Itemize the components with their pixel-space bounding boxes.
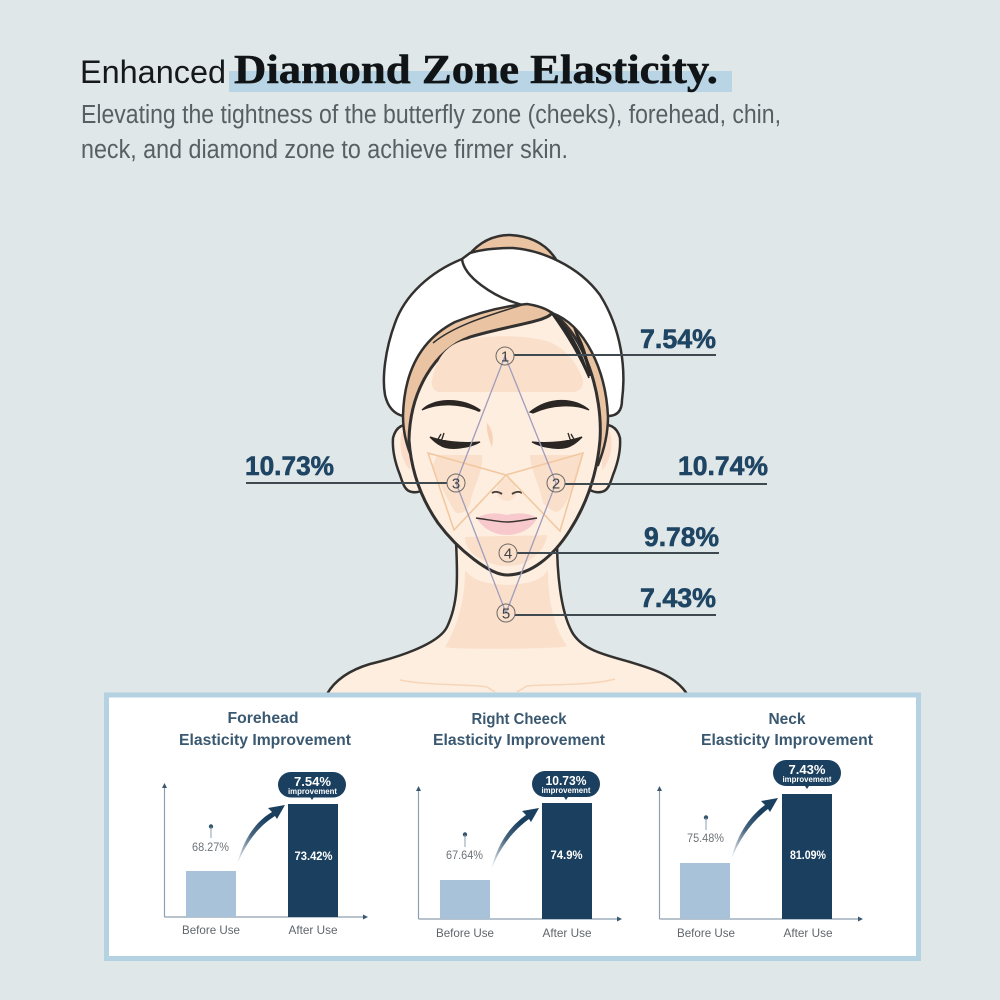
before value [192,824,229,854]
diamond zone lines [456,356,556,613]
title [80,46,732,92]
subtitle text [81,101,781,164]
marker 4 and value 9.78%: 9.78% [644,522,719,552]
improvement pill [532,771,600,800]
improvement pill [773,760,841,789]
before bar [186,871,236,917]
after bar [782,794,832,919]
marker 1 and value 7.54%: 7.54% [640,324,716,354]
cheek zones [433,455,582,513]
subtitle text: Elevating the tightness of the butterfly zone (cheeks), forehead, chin, [81,101,781,129]
face [409,313,600,575]
lips [477,513,537,535]
eyebrows [422,400,589,413]
heading [701,711,873,749]
growth arrow [491,808,539,870]
marker 1 and value 7.54%: 1 [501,348,509,366]
before value: 75.48% [687,833,724,845]
improvement pill: 7.43% [788,762,826,777]
closed eyes [430,433,582,448]
growth arrow [731,798,778,860]
after value: 81.09% [790,850,826,862]
marker 2 and value 10.74%: 10.74% [678,451,768,481]
marker 2 and value 10.74% [547,451,768,492]
collarbone lines [400,679,615,692]
axis labels [436,926,592,940]
hair strand [433,305,522,343]
after bar [542,803,592,919]
after value: 74.9% [550,850,582,862]
before value [446,832,483,862]
heading [179,710,351,749]
heading [433,711,605,749]
before bar [440,880,490,919]
axis labels: After Use [542,926,592,940]
improvement pill: 10.73% [546,773,587,788]
marker 3 and value 10.73% [245,451,465,492]
after bar [288,804,338,917]
marker 1 and value 7.54% [496,324,716,366]
neck and shoulders [327,540,687,694]
heading: Neck [768,711,806,728]
before value [687,815,724,845]
before value: 67.64% [446,850,483,862]
after value: 73.42% [294,851,332,863]
marker 5 and value 7.43% [497,583,716,622]
chart: forehead [162,710,368,937]
improvement pill: improvement [288,787,337,796]
marker 3 and value 10.73%: 10.73% [245,451,334,481]
left ear [393,425,423,492]
chin zone [465,535,547,566]
chart: right cheek [416,711,622,940]
before bar [680,863,730,919]
heading: Elasticity Improvement [179,732,351,749]
dark hair lock [552,314,590,378]
nose [492,492,522,494]
axis labels [182,923,338,937]
title: Enhanced [80,54,226,90]
heading: Elasticity Improvement [701,732,873,749]
neck elasticity zone [445,570,567,649]
heading: Forehead [228,710,298,727]
axes [418,790,618,919]
towel [384,248,623,416]
hair [403,304,608,465]
axes [164,786,364,917]
before value: 68.27% [192,842,229,854]
axis labels: Before Use [436,926,494,940]
axis labels: Before Use [677,926,735,940]
heading: Elasticity Improvement [433,732,605,749]
forehead zone [432,336,583,392]
marker 5 and value 7.43%: 5 [502,606,510,622]
marker 4 and value 9.78%: 4 [504,546,512,562]
axis labels: Before Use [182,923,240,937]
panel: charts [106,695,918,958]
hair bun [468,235,555,262]
axes [660,790,859,919]
heading: Right Cheeck [472,711,567,728]
title: Diamond Zone Elasticity. [234,46,718,92]
improvement pill: 7.54% [294,774,331,789]
axis labels: After Use [784,926,833,940]
marker 3 and value 10.73%: 3 [452,476,460,492]
marker 5 and value 7.43%: 7.43% [640,583,716,613]
subtitle text: neck, and diamond zone to achieve firmer skin. [81,136,568,164]
axis labels [677,926,833,940]
improvement pill: improvement [542,786,591,795]
improvement pill: improvement [782,775,832,784]
improvement pill [278,772,346,800]
axis labels: After Use [288,923,338,937]
marker 2 and value 10.74%: 2 [552,476,560,492]
face illustration [327,235,687,694]
butterfly zone lines [428,453,583,531]
nose shading [487,423,493,447]
chart: neck [657,711,873,940]
growth arrow [237,805,285,865]
right ear [590,425,620,492]
marker 4 and value 9.78% [499,522,719,562]
towel fold [462,259,552,313]
